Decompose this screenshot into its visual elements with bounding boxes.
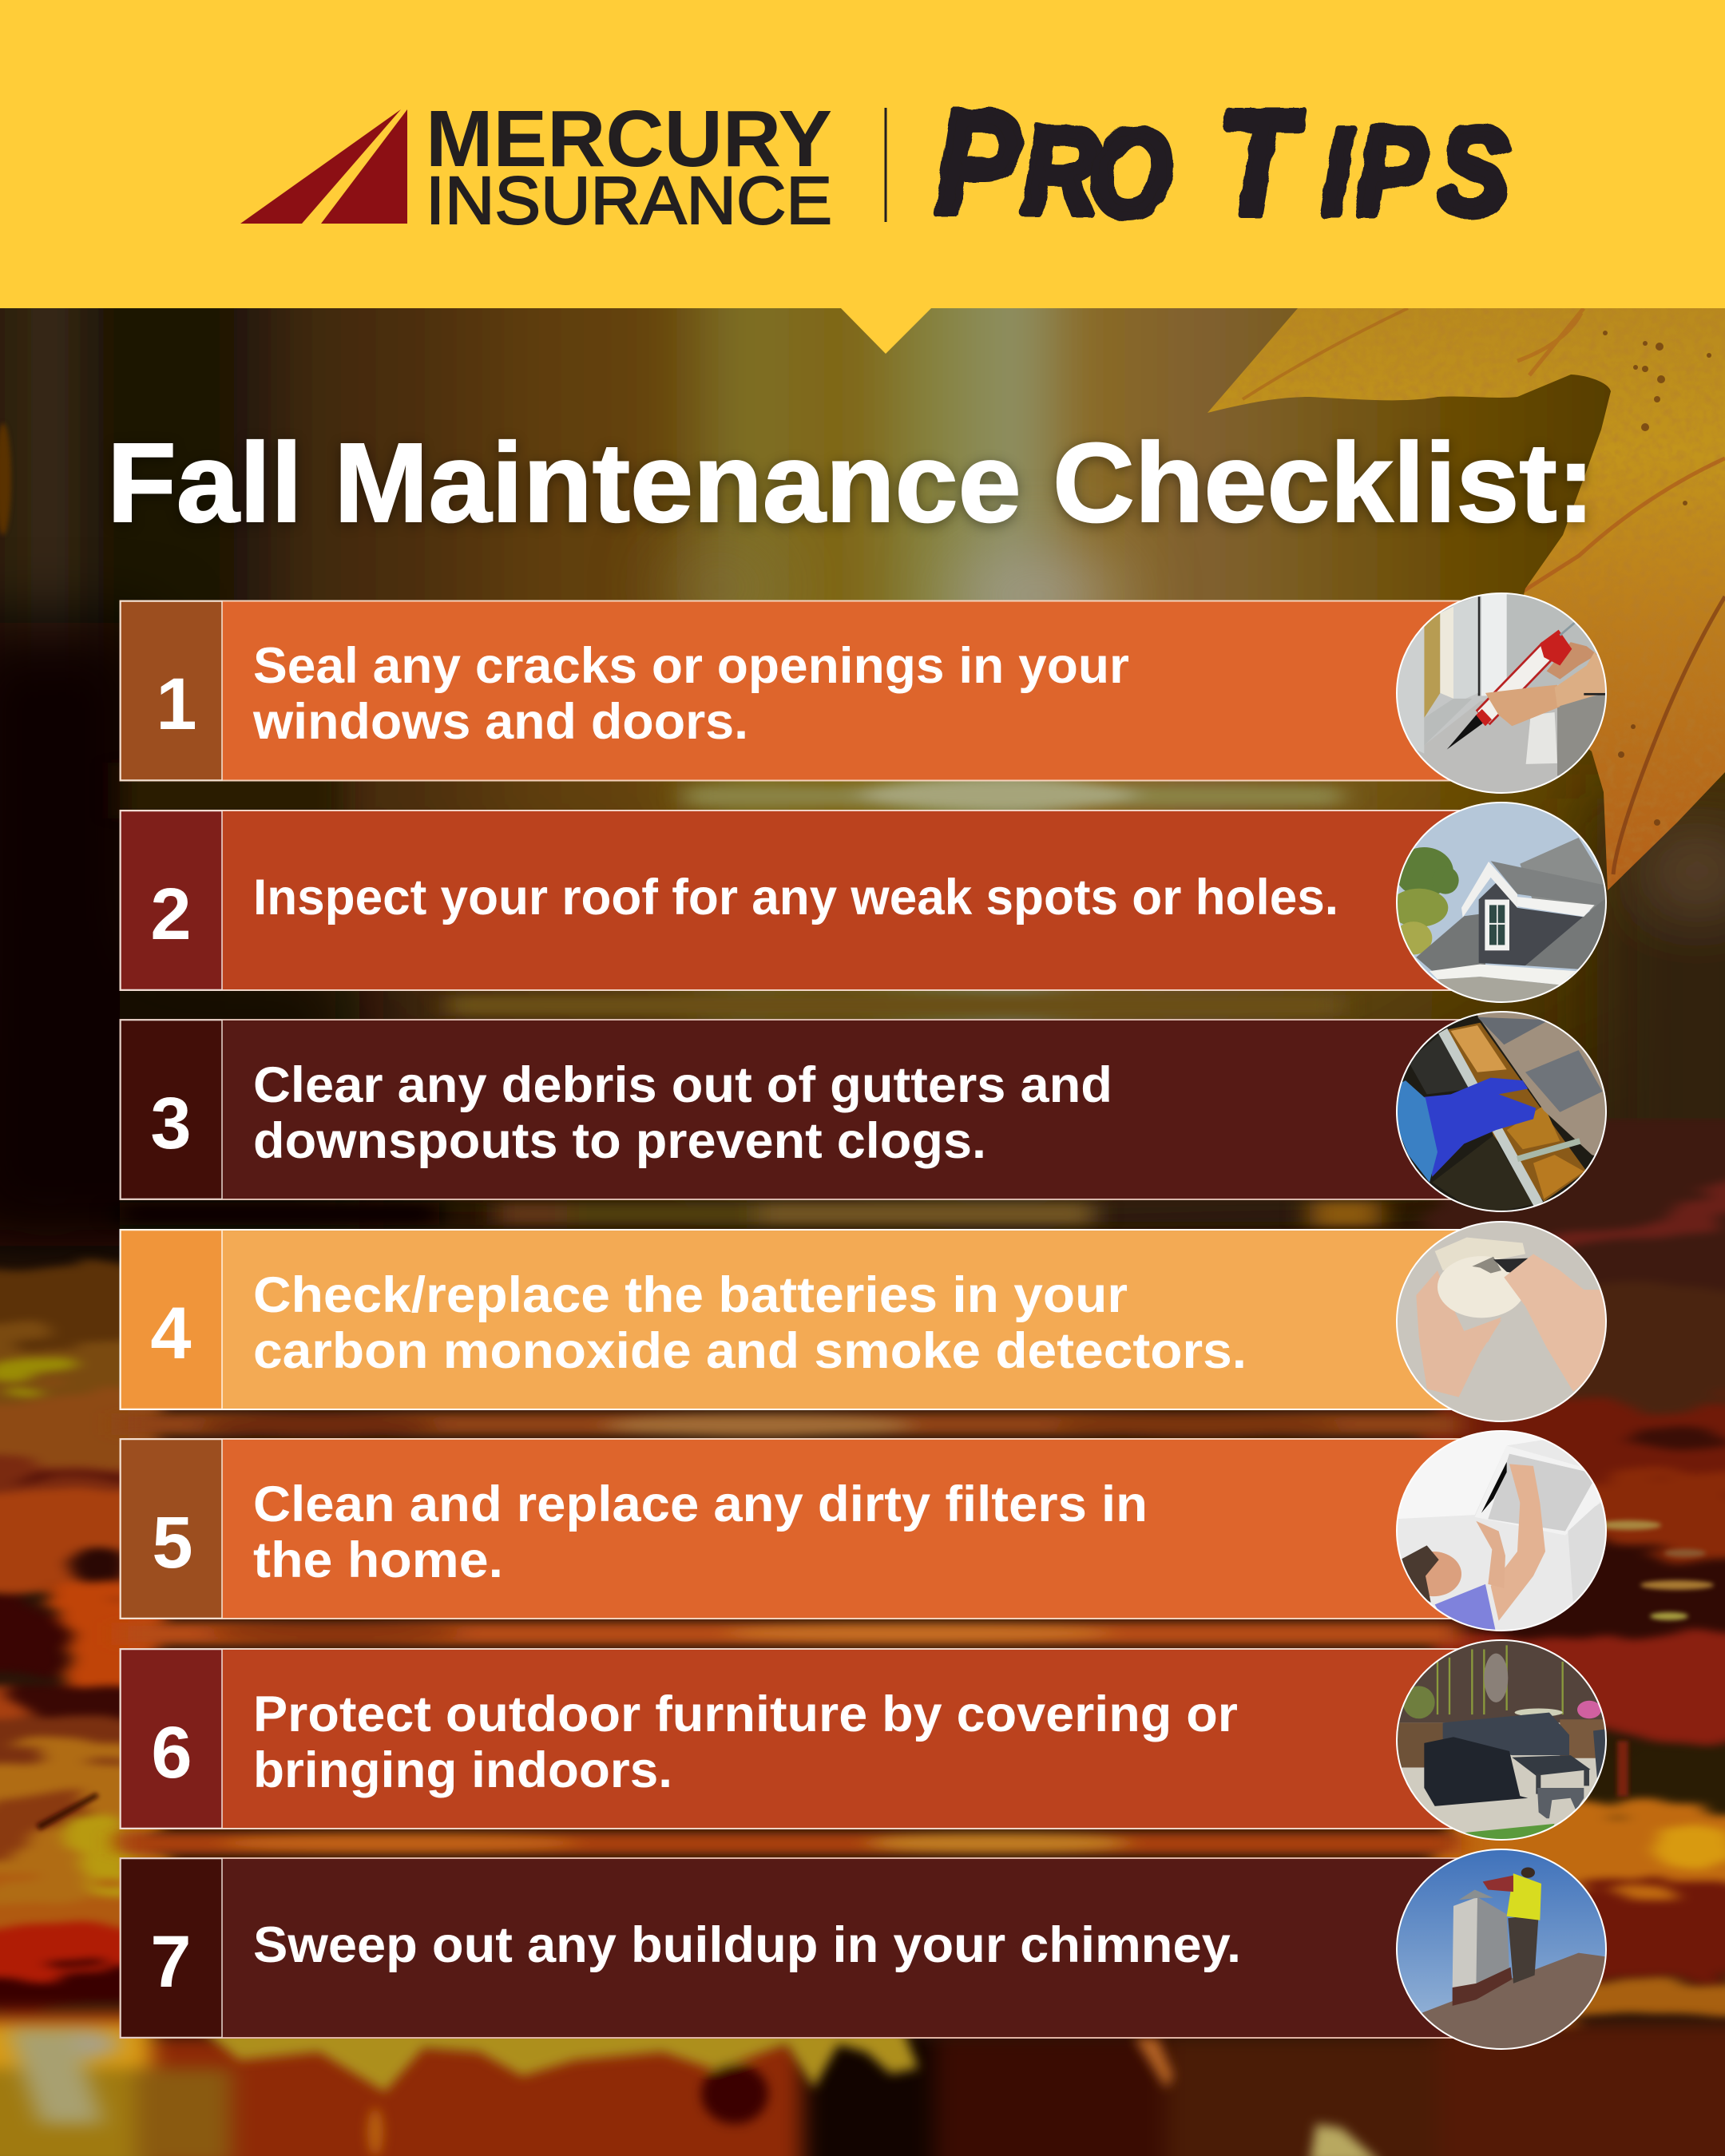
checklist item 7 — [120, 1845, 1629, 2057]
item 7 photo: chimney sweep on roof — [1374, 1845, 1629, 2057]
item 7 number cell — [121, 1859, 222, 2038]
right column — [1438, 1102, 1725, 1278]
item 5 text: Clean and replace any dirty filters in — [253, 1476, 1148, 1532]
item 2 photo: house roof — [1398, 803, 1605, 1001]
heading: Pro Tips: P — [935, 80, 1021, 246]
checklist item 1 — [120, 583, 1629, 803]
item 5 text: the home. — [253, 1532, 503, 1588]
wordmark: INSURANCE — [426, 163, 832, 238]
item 4 text — [253, 1267, 1247, 1379]
item 2 photo ring — [1397, 803, 1606, 1002]
heading: Pro Tips: S — [1438, 101, 1509, 240]
item 4 number cell — [121, 1230, 222, 1409]
item 1 photo ring — [1397, 593, 1606, 793]
wordmark: MERCURY — [426, 94, 832, 184]
checklist item 2 — [120, 798, 1629, 1007]
item 1 photo: caulking a window — [1398, 594, 1605, 792]
heading: Pro Tips — [935, 80, 1509, 246]
item 5 text — [253, 1476, 1148, 1588]
checklist item 6 — [120, 1637, 1629, 1845]
item 1 number cell — [121, 601, 222, 780]
item 3 number cell — [121, 1021, 222, 1199]
item 4 text: Check/replace the batteries in your — [253, 1267, 1128, 1323]
heading: Pro Tips: P — [1356, 101, 1427, 240]
item 4 photo ring — [1397, 1222, 1606, 1421]
large autumn leaf top right — [1182, 308, 1725, 899]
item 3 text: Clear any debris out of gutters and — [253, 1057, 1112, 1113]
header band — [0, 0, 1725, 354]
main title: Fall Maintenance Checklist: — [107, 419, 1595, 545]
heading: Pro Tips: I — [1322, 101, 1353, 240]
item 3 bar — [120, 1020, 1461, 1199]
item 4 text: carbon monoxide and smoke detectors. — [253, 1323, 1247, 1379]
item 3 photo ring — [1397, 1012, 1606, 1211]
bottom band — [152, 2038, 807, 2156]
item 1 number: 1 — [156, 664, 197, 745]
item 3 number: 3 — [150, 1083, 192, 1164]
item 7 bar — [120, 1858, 1461, 2038]
item 2 number cell — [121, 811, 222, 990]
item 3 photo: clearing gutter — [1398, 1013, 1605, 1211]
item 1 bar — [120, 600, 1461, 781]
header divider — [885, 108, 886, 222]
checklist item 4 — [120, 1218, 1629, 1428]
item 6 bar — [120, 1649, 1461, 1829]
item 3 text — [253, 1057, 1112, 1169]
item 4 photo: smoke detector battery — [1374, 1218, 1629, 1428]
left column — [0, 1270, 160, 1342]
checklist item 3 — [120, 1006, 1629, 1221]
item 6 text: bringing indoors. — [253, 1742, 672, 1798]
item 7 photo ring — [1397, 1849, 1606, 2049]
item 3 text: downspouts to prevent clogs. — [253, 1113, 986, 1169]
item 6 number cell — [121, 1650, 222, 1829]
item 6 photo: covered patio furniture — [1374, 1637, 1629, 1845]
checklist item 5 — [120, 1429, 1629, 1637]
heading: Pro Tips: R — [1022, 101, 1099, 240]
item 6 number: 6 — [151, 1712, 192, 1793]
item 1 text — [252, 638, 1129, 750]
item 2 bar — [120, 810, 1461, 990]
item 6 text: Protect outdoor furniture by covering or — [253, 1686, 1238, 1742]
item 5 number cell — [121, 1439, 222, 1618]
lower gaps — [120, 1413, 1461, 1435]
item 6 text — [253, 1686, 1238, 1798]
item 1 text: Seal any cracks or openings in your — [253, 638, 1129, 694]
item 5 bar — [120, 1439, 1461, 1619]
wordmark — [426, 94, 832, 238]
item 2 number: 2 — [150, 874, 192, 955]
item 1 text: windows and doors. — [252, 694, 748, 750]
item 2 text: Inspect your roof for any weak spots or holes. — [253, 870, 1338, 925]
item 5 photo: replacing filter — [1374, 1429, 1629, 1637]
item 7 text: Sweep out any buildup in your chimney. — [253, 1917, 1241, 1973]
item 4 bar — [120, 1230, 1461, 1409]
item 5 photo ring — [1397, 1431, 1606, 1631]
heading: Pro Tips: T — [1219, 80, 1305, 246]
item 6 photo ring — [1397, 1640, 1606, 1840]
item 7 number: 7 — [150, 1921, 192, 2003]
bottom-left corner — [0, 2011, 152, 2028]
logo: Mercury Insurance — [240, 94, 832, 238]
item 4 number: 4 — [150, 1293, 192, 1374]
header pointer — [841, 308, 931, 354]
heading: Pro Tips: O — [1089, 103, 1201, 242]
item 5 number: 5 — [152, 1502, 193, 1583]
logo mark — [240, 109, 407, 224]
